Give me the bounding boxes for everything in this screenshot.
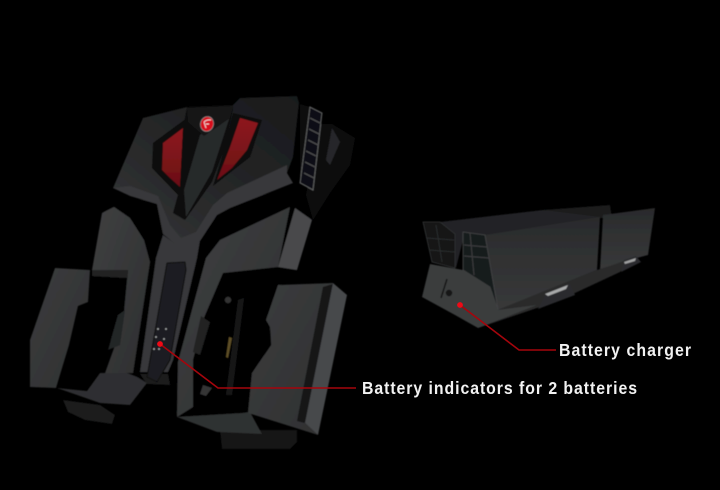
- rear top: [540, 205, 612, 222]
- second battery: [600, 208, 655, 270]
- front clip: [538, 283, 575, 309]
- center column: [140, 235, 200, 372]
- cavity contacts: [193, 297, 244, 396]
- base right: [478, 262, 630, 328]
- charger port: [441, 279, 452, 298]
- left cavity rim: [92, 270, 128, 278]
- left recess: [152, 118, 187, 197]
- wing detail: [326, 128, 340, 165]
- bottom feet: [220, 430, 297, 449]
- battery charger illustration: [422, 205, 655, 328]
- front battery: [485, 217, 600, 310]
- callout: battery indicators: Battery indicators for 2 batteries: [362, 378, 637, 398]
- right recess: [213, 113, 262, 186]
- left cavity detail: [108, 310, 125, 350]
- backpack illustration: [30, 96, 355, 449]
- callout: battery charger: [457, 302, 691, 360]
- charger base front: [422, 264, 537, 328]
- shell lower rim: [113, 165, 293, 248]
- center spine: [173, 105, 233, 220]
- rear wing: [306, 124, 355, 220]
- rear battery: [440, 210, 600, 268]
- left body panel: [92, 207, 150, 373]
- left flap: [30, 268, 90, 388]
- right flap: [248, 283, 347, 435]
- left foot: [63, 400, 115, 424]
- callout: battery charger: Battery charger: [559, 340, 691, 360]
- center lower block: [140, 374, 170, 385]
- indicator dots: [153, 328, 167, 350]
- upper shell: [113, 96, 299, 247]
- rear clip: [621, 256, 641, 272]
- red mesh right: [217, 118, 258, 180]
- rear grille: [423, 222, 455, 268]
- right side strip: [278, 208, 312, 270]
- side vent: [300, 104, 322, 190]
- callout: battery indicators: [157, 341, 637, 398]
- front grille: [463, 232, 498, 310]
- center strip: [147, 262, 186, 382]
- left lower housing: [57, 373, 147, 405]
- logo badge: [199, 115, 215, 133]
- right lower housing: [177, 412, 262, 434]
- right body panel: [177, 207, 290, 417]
- black backing: [90, 190, 312, 417]
- red mesh left: [162, 128, 183, 187]
